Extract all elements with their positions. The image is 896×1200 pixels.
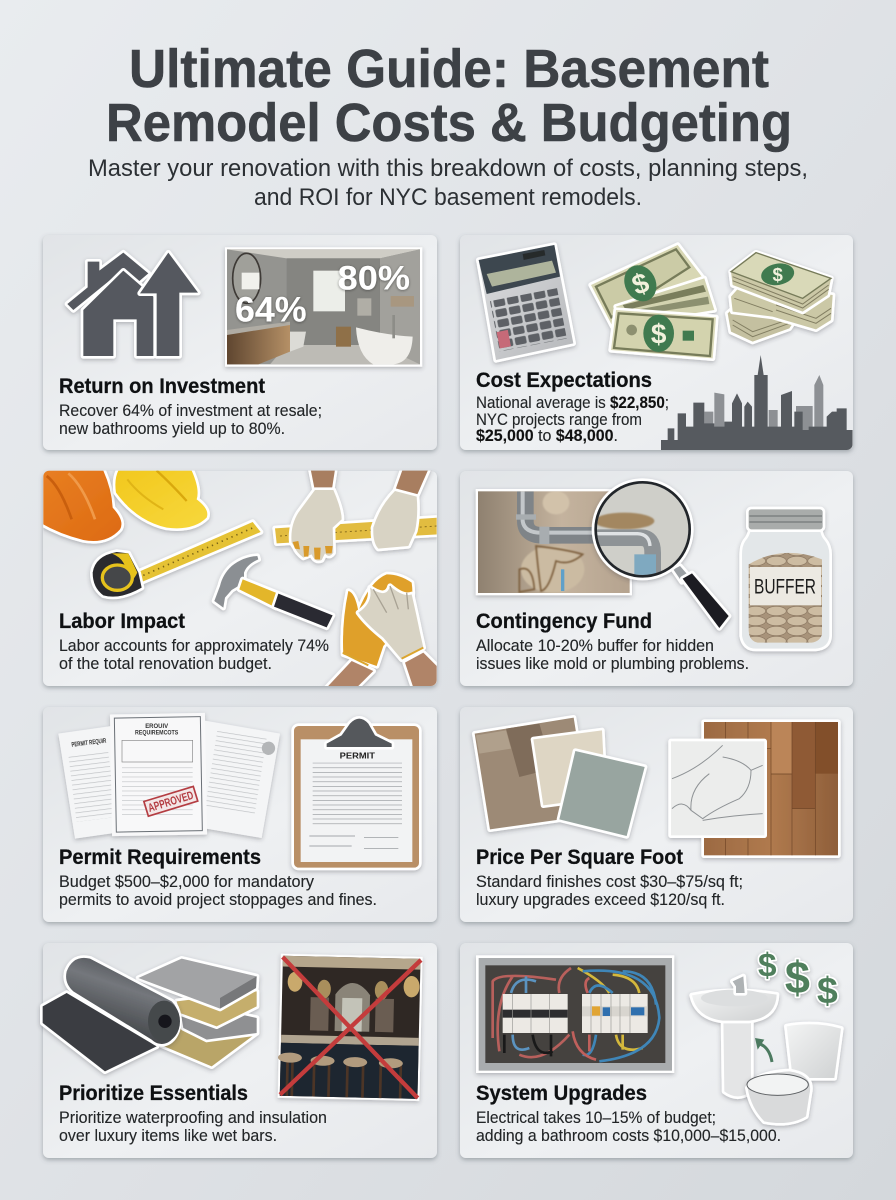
photo: bathroom with percentages: 80% — [338, 259, 410, 297]
title: Ultimate Guide: Basement — [129, 39, 769, 99]
photo: wet bar crossed out — [277, 954, 423, 1101]
heading: Price Per Square Foot — [476, 845, 683, 869]
subtitle — [88, 155, 808, 211]
illustration: permit documents: EROUIV — [145, 724, 168, 730]
illustration: insulation boards — [138, 959, 257, 1066]
text block: Budget $500–$2,000 for mandatory — [59, 873, 315, 891]
icon: curved arrow — [755, 1038, 772, 1062]
icon: fanned banknotes: $ — [651, 318, 667, 349]
text block — [59, 873, 377, 909]
icon: dollar signs: $ — [817, 969, 838, 1011]
icon: permit clipboard: PERMIT — [340, 751, 375, 761]
text block: adding a bathroom costs $10,000–$15,000. — [476, 1127, 781, 1145]
icon: work gloves — [327, 574, 438, 688]
icon: city skyline — [661, 355, 853, 452]
icon: house with up arrow — [67, 253, 198, 356]
icon: stacks of cash — [728, 253, 833, 342]
text block — [476, 394, 669, 445]
illustration: tools and gloves — [40, 469, 438, 688]
text block — [476, 1109, 781, 1145]
heading: Cost Expectations — [476, 368, 652, 392]
heading: System Upgrades — [476, 1081, 647, 1105]
text block — [476, 873, 743, 909]
text block: over luxury items like wet bars. — [59, 1127, 277, 1145]
illustration: standard finish swatches — [475, 718, 645, 836]
icon: pedestal sink — [692, 976, 777, 1096]
text block — [59, 1109, 327, 1145]
icon: dollar signs: $ — [758, 947, 777, 984]
title — [106, 39, 792, 153]
panel: labor impact — [40, 469, 438, 688]
panel: return on investment — [43, 235, 437, 450]
icon: coin jar labeled buffer — [742, 509, 829, 649]
text block: National average is $22,850; — [476, 394, 669, 412]
panel: system upgrades — [460, 943, 853, 1158]
photo: bathroom with percentages: 64% — [235, 291, 307, 330]
heading: Labor Impact — [59, 609, 185, 633]
photo: leaking pipe wall — [476, 489, 632, 595]
icon: toilet — [747, 1024, 841, 1123]
heading: Prioritize Essentials — [59, 1081, 248, 1105]
illustration: luxury finish samples — [671, 722, 838, 855]
panel: prioritize essentials — [43, 943, 437, 1158]
text block: Labor accounts for approximately 74% — [59, 637, 329, 655]
text block — [476, 637, 749, 673]
icon: calculator — [479, 245, 573, 360]
illustration: electrical panel — [476, 955, 674, 1073]
icon: yellow hard hat — [115, 471, 207, 528]
text block: NYC projects range from — [476, 411, 642, 429]
text block: issues like mold or plumbing problems. — [476, 655, 749, 673]
text block: Standard finishes cost $30–$75/sq ft; — [476, 873, 743, 891]
icon: hammer — [214, 556, 333, 627]
icon: dollar signs — [758, 947, 838, 1011]
text block: of the total renovation budget. — [59, 655, 272, 673]
text block: Allocate 10-20% buffer for hidden — [476, 637, 714, 655]
text block — [59, 402, 322, 438]
icon: gloved hands holding ruler — [275, 469, 438, 561]
photo: bathroom with percentages — [225, 247, 422, 367]
text block: Prioritize waterproofing and insulation — [59, 1109, 327, 1127]
icon: stacks of cash: $ — [772, 264, 783, 285]
text block: permits to avoid project stoppages and fines. — [59, 891, 377, 909]
panel: permit requirements — [43, 707, 437, 922]
icon: orange hard hat — [40, 471, 121, 541]
icon: fanned banknotes — [591, 245, 716, 358]
icon: fanned banknotes: $ — [628, 266, 654, 301]
text block — [59, 637, 329, 673]
icon: permit clipboard — [294, 719, 419, 868]
icon: tape measure — [93, 522, 261, 597]
panel: contingency fund — [460, 471, 853, 686]
panel: cost expectations — [460, 235, 853, 452]
subtitle: Master your renovation with this breakdown of costs, planning steps, — [88, 155, 808, 182]
subtitle: and ROI for NYC basement remodels. — [254, 184, 642, 211]
title: Remodel Costs & Budgeting — [106, 93, 792, 153]
text block: new bathrooms yield up to 80%. — [59, 420, 285, 438]
text block: Recover 64% of investment at resale; — [59, 402, 322, 420]
text block: $25,000 to $48,000. — [476, 427, 618, 445]
heading: Contingency Fund — [476, 609, 652, 633]
illustration: permit documents: PERMIT REQUIR — [71, 738, 107, 749]
heading: Return on Investment — [59, 374, 265, 398]
icon: dollar signs: $ — [785, 952, 810, 1003]
illustration: permit documents: REQUIREMCOTS — [135, 731, 178, 737]
illustration: permit documents: APPROVED — [147, 789, 195, 815]
icon: magnifying glass — [594, 481, 729, 628]
panel: price per square foot — [460, 707, 853, 922]
text block: Electrical takes 10–15% of budget; — [476, 1109, 716, 1127]
text block: luxury upgrades exceed $120/sq ft. — [476, 891, 725, 909]
illustration: permit documents — [58, 713, 280, 839]
icon: waterproofing membrane roll — [43, 958, 180, 1071]
icon: coin jar labeled buffer: BUFFER — [754, 574, 816, 598]
heading: Permit Requirements — [59, 845, 261, 869]
